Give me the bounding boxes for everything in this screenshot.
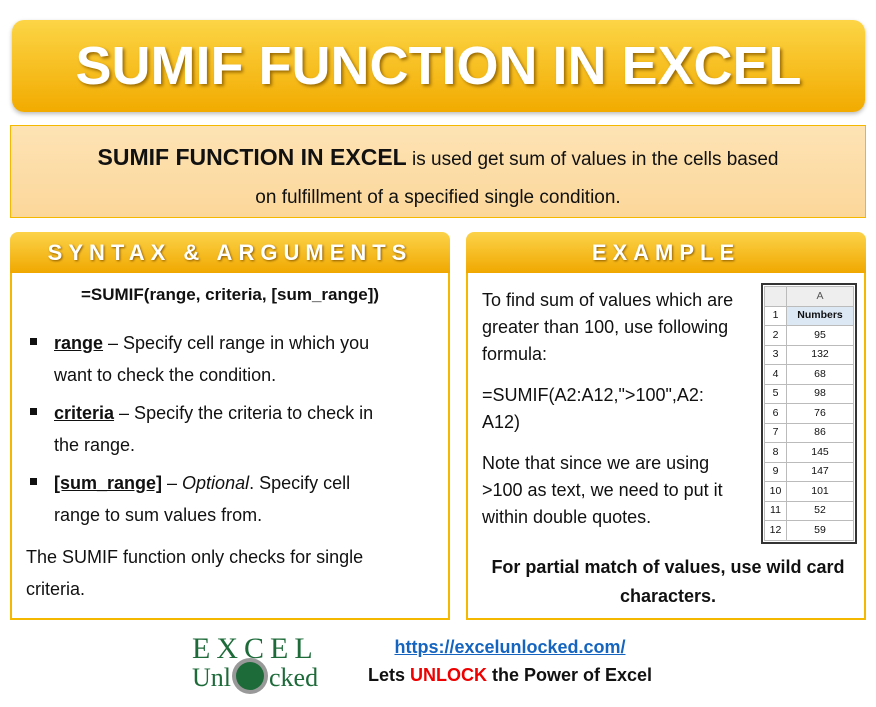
header: syntax & arguments xyxy=(10,232,450,273)
header: syntax & arguments: SYNTAX & ARGUMENTS xyxy=(48,240,412,265)
example text: A12) xyxy=(482,412,520,432)
example text: =SUMIF(A2:A12,">100",A2: xyxy=(482,385,704,405)
example text: To find sum of values which are greater than 100, use following formula: xyxy=(482,290,733,364)
excel table: 132 xyxy=(811,348,829,360)
excel table: 1 xyxy=(773,309,778,321)
title banner: SUMIF FUNCTION IN EXCEL xyxy=(76,36,802,96)
argument list xyxy=(30,333,373,525)
excel table: Numbers xyxy=(797,309,843,321)
excel table: 7 xyxy=(773,426,778,438)
icon: lock xyxy=(232,658,268,694)
syntax formula: =SUMIF(range, criteria, [sum_range]) xyxy=(81,285,379,304)
description box xyxy=(10,125,866,218)
excel table: 76 xyxy=(814,407,826,419)
panel: syntax xyxy=(10,273,450,620)
excel table xyxy=(761,283,857,544)
excel table: 3 xyxy=(773,348,778,360)
excel table: 68 xyxy=(814,368,826,380)
argument list: range – Specify cell range in which you want to check the condition. xyxy=(54,333,369,385)
excel table: 6 xyxy=(773,407,778,419)
excel table: 4 xyxy=(773,368,778,380)
excel table: 10 xyxy=(770,485,781,497)
description box: SUMIF FUNCTION IN EXCEL is used get sum of values in the cells based xyxy=(98,144,778,170)
excel table: 9 xyxy=(773,465,778,477)
example text: Note that since we are using >100 as text, we need to put it within double quotes. xyxy=(482,453,723,527)
title banner xyxy=(12,20,865,112)
argument list: [sum_range] – Optional. Specify cell range to sum values from. xyxy=(54,473,350,525)
excel table: 86 xyxy=(814,426,826,438)
argument list: criteria – Specify the criteria to check in the range. xyxy=(54,403,373,455)
excel table: 145 xyxy=(811,446,829,458)
example text xyxy=(482,290,733,527)
excel table: 2 xyxy=(773,329,778,341)
panel: example xyxy=(466,273,866,620)
logo xyxy=(192,632,319,694)
excel table: 147 xyxy=(811,465,829,477)
excel table: 95 xyxy=(814,329,826,341)
excel table: 98 xyxy=(814,387,826,399)
excel table: 8 xyxy=(773,446,778,458)
bold tip: For partial match of values, use wild card characters. xyxy=(491,557,845,606)
tagline: Lets UNLOCK the Power of Excel xyxy=(368,665,652,685)
excel table: 12 xyxy=(770,524,781,536)
description box: on fulfillment of a specified single condition. xyxy=(255,187,621,208)
excel table: 52 xyxy=(814,504,826,516)
header: example: EXAMPLE xyxy=(592,240,740,265)
logo: Unl cked xyxy=(192,663,318,692)
header: example xyxy=(466,232,866,273)
note: The SUMIF function only checks for single criteria. xyxy=(26,547,363,599)
excel table: 5 xyxy=(773,387,778,399)
logo: EXCEL xyxy=(192,632,319,665)
excel table: 11 xyxy=(770,504,781,516)
excel table: A xyxy=(816,290,824,302)
footer link: https://excelunlocked.com/ xyxy=(394,637,626,657)
excel table: 101 xyxy=(811,485,829,497)
excel table: 59 xyxy=(814,524,826,536)
